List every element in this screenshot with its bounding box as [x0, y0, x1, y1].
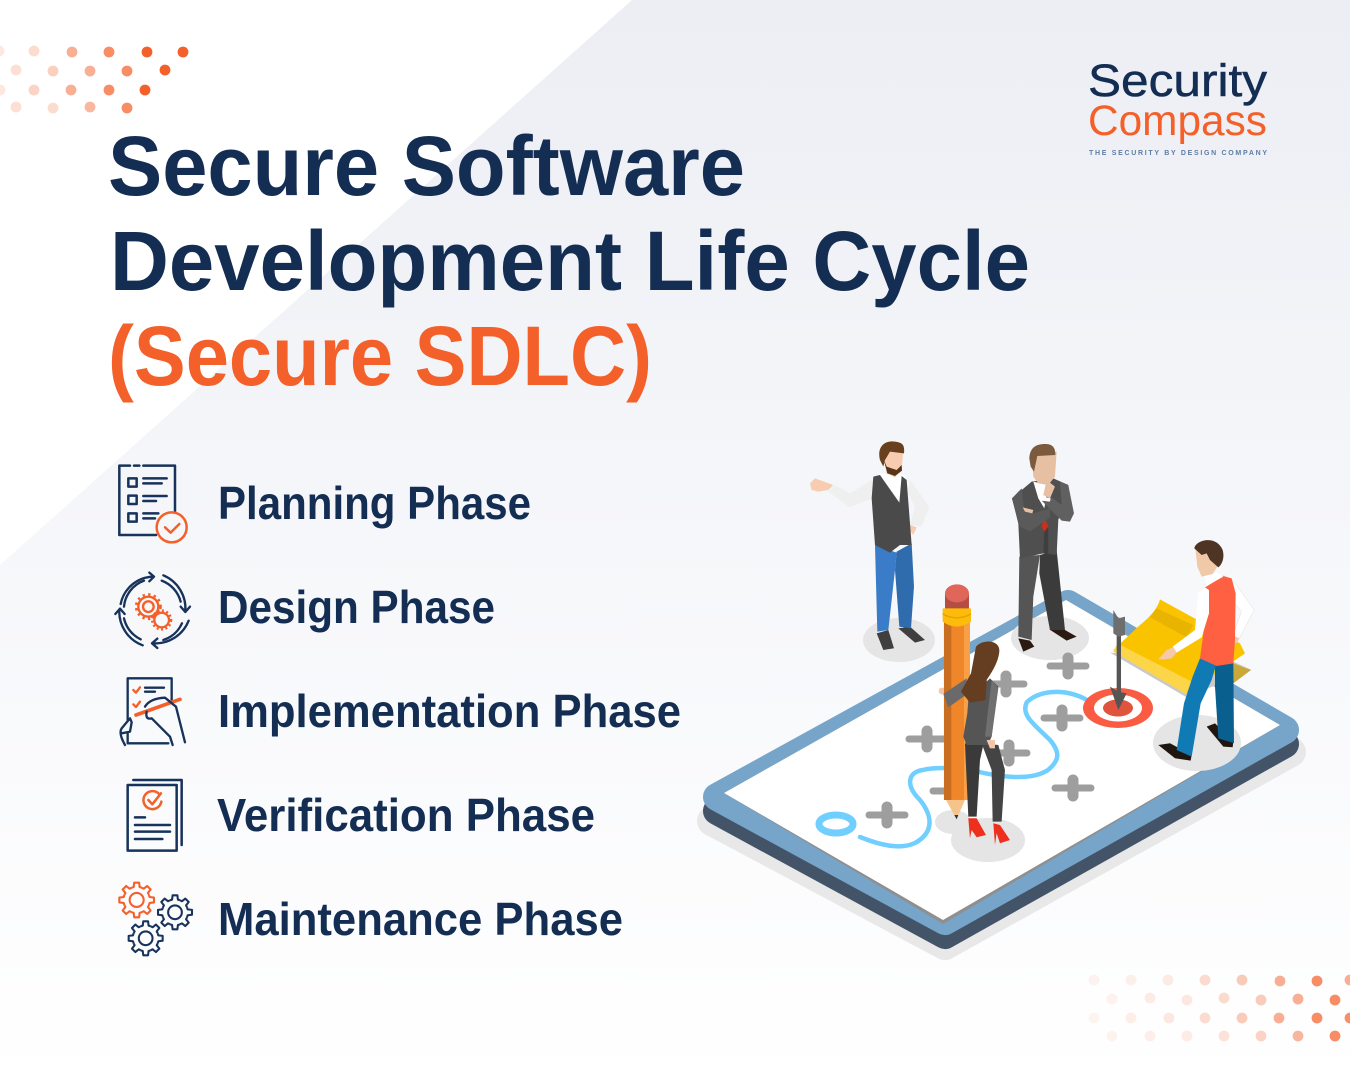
planning phase	[119, 466, 531, 542]
title	[108, 119, 1030, 403]
pencil	[939, 584, 971, 819]
person: man in suit	[1012, 444, 1077, 652]
logo: Compass	[1088, 97, 1267, 145]
label: design: Design Phase	[218, 581, 495, 633]
title: Development Life Cycle	[110, 214, 1030, 308]
icon: hand writing on paper	[121, 678, 185, 745]
yellow book	[1110, 599, 1252, 697]
dots: top left	[0, 46, 188, 113]
logo: Security	[1088, 55, 1268, 106]
icon: gears in cycle	[115, 573, 190, 648]
icon: verified document	[128, 780, 182, 851]
dots: bottom right	[1089, 975, 1350, 1041]
label: planning: Planning Phase	[218, 477, 531, 529]
plus markers	[869, 658, 1091, 823]
route path	[819, 692, 1087, 846]
floor shadows	[863, 616, 1241, 862]
maintenance phase	[119, 883, 623, 955]
logo: THE SECURITY BY DESIGN COMPANY	[1089, 150, 1267, 157]
title: Secure Software	[108, 119, 745, 213]
implementation phase	[121, 678, 681, 745]
person: bearded man with vest	[810, 441, 929, 650]
person: woman holding pencil	[943, 641, 1010, 845]
verification phase	[128, 780, 595, 851]
logo	[1088, 55, 1268, 157]
isometric illustration	[712, 441, 1291, 945]
tablet	[712, 600, 1291, 945]
label: maintenance: Maintenance Phase	[218, 893, 623, 945]
phase list	[115, 466, 681, 955]
person: man with red vest	[1158, 540, 1254, 761]
arrow	[1110, 610, 1127, 710]
icon: checklist	[119, 466, 187, 542]
label: implementation: Implementation Phase	[218, 685, 681, 737]
design phase	[115, 573, 495, 648]
label: verification: Verification Phase	[217, 789, 595, 841]
icon: three gears	[119, 883, 192, 955]
target	[1083, 688, 1153, 728]
title: (Secure SDLC)	[108, 309, 652, 403]
